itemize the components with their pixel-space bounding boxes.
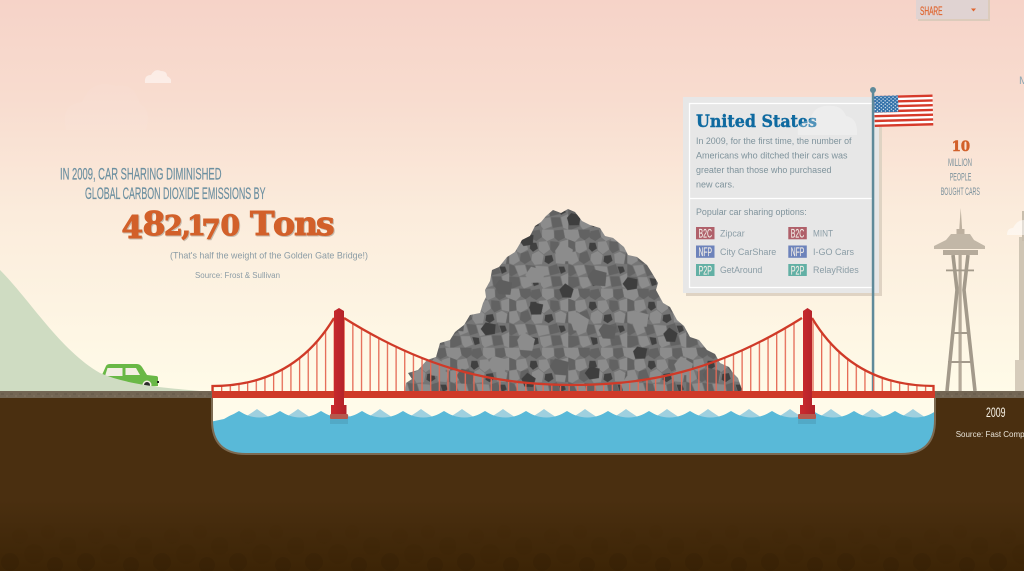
faint large cloud <box>65 84 148 130</box>
water body <box>215 435 932 453</box>
headline text <box>60 164 368 280</box>
flag pole <box>870 87 876 391</box>
big number: 1 <box>187 211 206 242</box>
option: GetAround <box>696 264 762 277</box>
small cloud <box>145 70 171 83</box>
note: (That's half the weight of the Golden Gate Bridge!) <box>170 250 368 260</box>
cloud over panel <box>798 106 857 135</box>
text: BOUGHT CARS <box>941 186 980 198</box>
option: GetAround: GetAround <box>720 265 762 275</box>
option: Zipcar: B2C <box>698 228 712 240</box>
option: Zipcar <box>696 227 745 240</box>
suspenders <box>212 318 934 391</box>
panel: United States <box>683 97 882 296</box>
rock pile <box>400 205 750 395</box>
stat: 10 million people bought cars <box>941 139 980 198</box>
road strips <box>0 391 1024 398</box>
option: MINT: MINT <box>813 228 833 238</box>
panel body text: greater than those who purchased <box>696 165 832 175</box>
back waves <box>248 409 924 418</box>
big number: , <box>182 211 191 242</box>
front waves <box>214 411 934 421</box>
left shore gap <box>213 409 231 422</box>
option: City CarShare: City CarShare <box>720 247 776 257</box>
big number: 0 <box>220 209 240 242</box>
share button: SHARE <box>920 4 942 18</box>
icon: Space Needle <box>934 208 985 391</box>
source: Source: Frost & Sullivan <box>195 271 280 280</box>
panel body text: Americans who ditched their cars was <box>696 150 848 160</box>
icon: American flag <box>874 94 933 127</box>
panel heading: United States <box>696 112 817 131</box>
big number: 8 <box>142 204 165 243</box>
option: GetAround: P2P <box>698 265 712 277</box>
share button <box>916 0 990 21</box>
left tower <box>330 308 348 424</box>
stat number: 10 <box>952 139 970 155</box>
stat label <box>941 157 980 198</box>
option: I-GO Cars: NFP <box>791 247 804 259</box>
sky background <box>0 0 1024 392</box>
big number: 4 <box>122 210 143 246</box>
car <box>102 364 159 390</box>
option: RelayRides: P2P <box>791 265 804 277</box>
option: RelayRides: RelayRides <box>813 265 859 275</box>
water basin <box>212 398 935 455</box>
panel body text <box>696 136 852 190</box>
option: MINT <box>788 227 833 240</box>
options list <box>696 227 859 277</box>
deck <box>212 391 935 398</box>
panel body text: new cars. <box>696 180 734 190</box>
option: City CarShare <box>696 246 776 259</box>
big number: 7 <box>202 214 221 246</box>
option: MINT: B2C <box>791 228 804 240</box>
stat label: MILLION <box>948 157 972 169</box>
intro line 1: IN 2009, CAR SHARING DIMINISHED <box>60 164 221 184</box>
stat label: PEOPLE <box>950 172 971 184</box>
right tower <box>798 308 816 424</box>
cables <box>212 318 934 391</box>
Golden Gate bridge <box>212 308 935 424</box>
big number: 2 <box>164 211 183 242</box>
panel body text: In 2009, for the first time, the number of <box>696 136 852 146</box>
ground <box>0 536 1024 571</box>
big number: Tons <box>250 204 335 243</box>
option: I-GO Cars: I-GO Cars <box>813 247 854 257</box>
options heading: Popular car sharing options: <box>696 207 807 217</box>
option: City CarShare: NFP <box>698 247 712 259</box>
year label: 2009 <box>986 404 1006 420</box>
hill <box>0 270 200 391</box>
option: I-GO Cars <box>788 246 854 259</box>
intro line 2: GLOBAL CARBON DIOXIDE EMISSIONS BY <box>85 184 266 203</box>
option: RelayRides <box>788 264 859 277</box>
cloud right <box>1007 220 1024 235</box>
skyline building <box>1015 211 1024 391</box>
option: Zipcar: Zipcar <box>720 228 745 238</box>
